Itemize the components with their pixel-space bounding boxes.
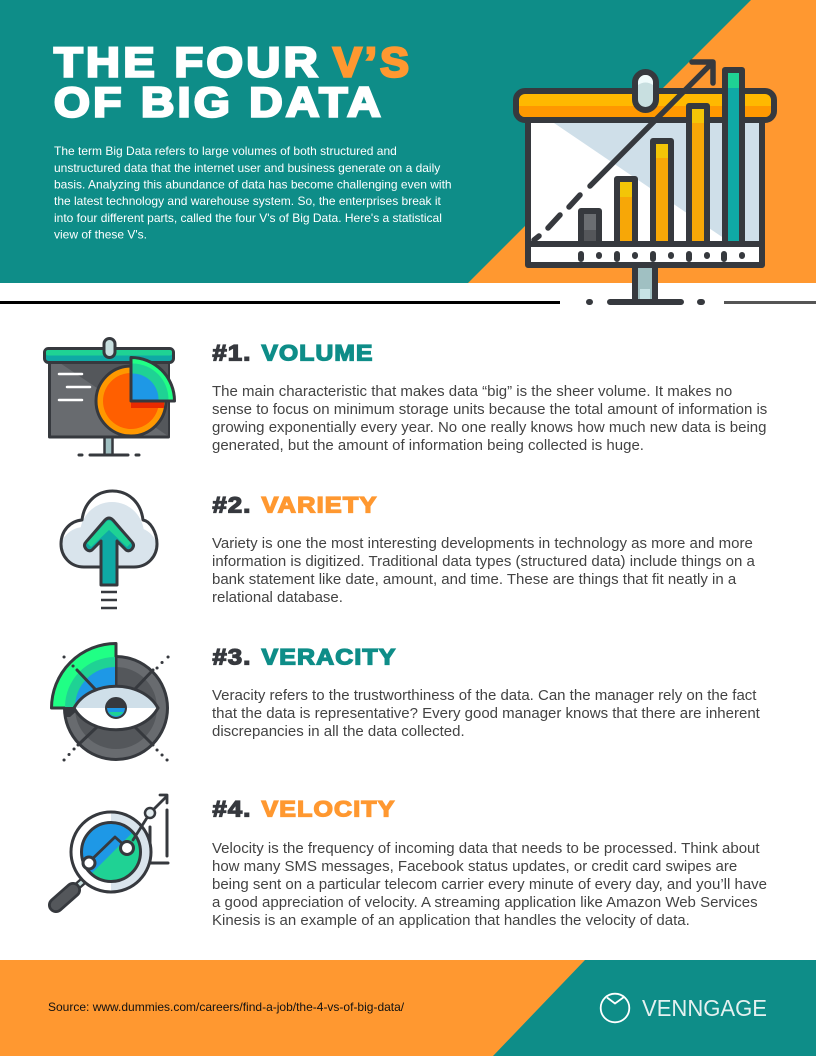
- section 4: velocity: [56, 795, 767, 929]
- footer background: [0, 960, 816, 1056]
- heading: veracity: VERACITY: [262, 644, 396, 670]
- wordmark: VENNGAGE: [642, 995, 767, 1021]
- heading: velocity: #4.: [212, 796, 252, 822]
- title: THE FOUR: [54, 38, 321, 86]
- knob: [635, 72, 656, 110]
- text: velocity: Kinesis is an example of an application that handles the velocity of data.: [212, 912, 690, 929]
- heading: volume: [212, 340, 374, 366]
- stand: [589, 265, 702, 302]
- text: veracity: discrepancies in all the data collected.: [212, 723, 465, 740]
- text: velocity: a good appreciation of velocity. A streaming application like Amazon Web Services: [212, 894, 758, 911]
- section 2: variety: [60, 491, 755, 608]
- text: volume: growing exponentially every year. No one really knows how much new data is being: [212, 419, 766, 436]
- trend arrow: [534, 62, 713, 240]
- intro text: the latest technology and warehouse system. So, the enterprises break it: [54, 194, 442, 208]
- heading: volume: #1.: [212, 340, 252, 366]
- text: volume: generated, but the amount of information being collected is huge.: [212, 437, 644, 454]
- text: velocity: how many SMS messages, Facebook status updates, or credit card swipes are: [212, 858, 737, 875]
- heading: variety: VARIETY: [262, 492, 378, 518]
- title: V’S: [333, 38, 412, 86]
- heading: velocity: [212, 796, 396, 822]
- text: variety: [212, 535, 755, 606]
- venngage logo: [601, 994, 767, 1022]
- bars: [581, 70, 742, 244]
- text: volume: The main characteristic that makes data “big” is the sheer volume. It makes no: [212, 383, 732, 400]
- icon: magnifier with graph: [56, 795, 168, 905]
- icon: presentation screen with bar chart: [516, 62, 774, 302]
- intro text: view of these V's.: [54, 228, 147, 242]
- text: volume: [212, 383, 767, 454]
- source text: Source: www.dummies.com/careers/find-a-job/the-4-vs-of-big-data/: [48, 1000, 405, 1014]
- icon: eye radar: [52, 644, 168, 760]
- intro text: into four different parts, called the four V's of Big Data. Here's a statistical: [54, 211, 442, 225]
- section 1: volume: [44, 338, 767, 455]
- icon: presentation screen with pie chart: [44, 338, 174, 455]
- screen: [528, 120, 762, 265]
- intro text: The term Big Data refers to large volumes of both structured and: [54, 144, 397, 158]
- heading: volume: VOLUME: [262, 340, 374, 366]
- intro text: basis. Analyzing this abundance of data has become challenging even with: [54, 178, 452, 192]
- icon: logo mark: [601, 994, 629, 1022]
- icon: cloud upload: [60, 491, 158, 608]
- text: velocity: Velocity is the frequency of incoming data that needs to be processed. Think about: [212, 840, 760, 857]
- text: veracity: Veracity refers to the trustworthiness of the data. Can the manager rely on the fact: [212, 687, 757, 704]
- divider line left: [0, 301, 560, 304]
- heading: variety: #2.: [212, 492, 252, 518]
- roller: [516, 91, 774, 120]
- text: variety: relational database.: [212, 589, 343, 606]
- text: variety: information is digitized. Traditional data types (structured data) include things on a: [212, 553, 755, 570]
- section 3: veracity: [52, 644, 761, 760]
- title: [54, 38, 412, 126]
- intro text: unstructured data that the internet user and business generate on a daily: [54, 161, 440, 175]
- header background: [0, 0, 816, 283]
- intro text: [54, 144, 452, 242]
- text: veracity: [212, 687, 761, 740]
- text: velocity: being sent on a particular telecom carrier every minute of every day, and you’ll have: [212, 876, 767, 893]
- text: veracity: that the data is representative? Every good manager knows that there are inherent: [212, 705, 761, 722]
- divider line right: [724, 301, 816, 304]
- text: variety: bank statement like date, amount, and time. These are things that fit neatly in a: [212, 571, 737, 588]
- title: OF BIG DATA: [54, 78, 384, 126]
- heading: velocity: VELOCITY: [262, 796, 396, 822]
- heading: veracity: [212, 644, 396, 670]
- text: volume: sense to focus on minimum storage units because the total amount of information is: [212, 401, 767, 418]
- heading: variety: [212, 492, 378, 518]
- text: velocity: [212, 840, 767, 929]
- text: variety: Variety is one the most interesting developments in technology as more and more: [212, 535, 753, 552]
- heading: veracity: #3.: [212, 644, 252, 670]
